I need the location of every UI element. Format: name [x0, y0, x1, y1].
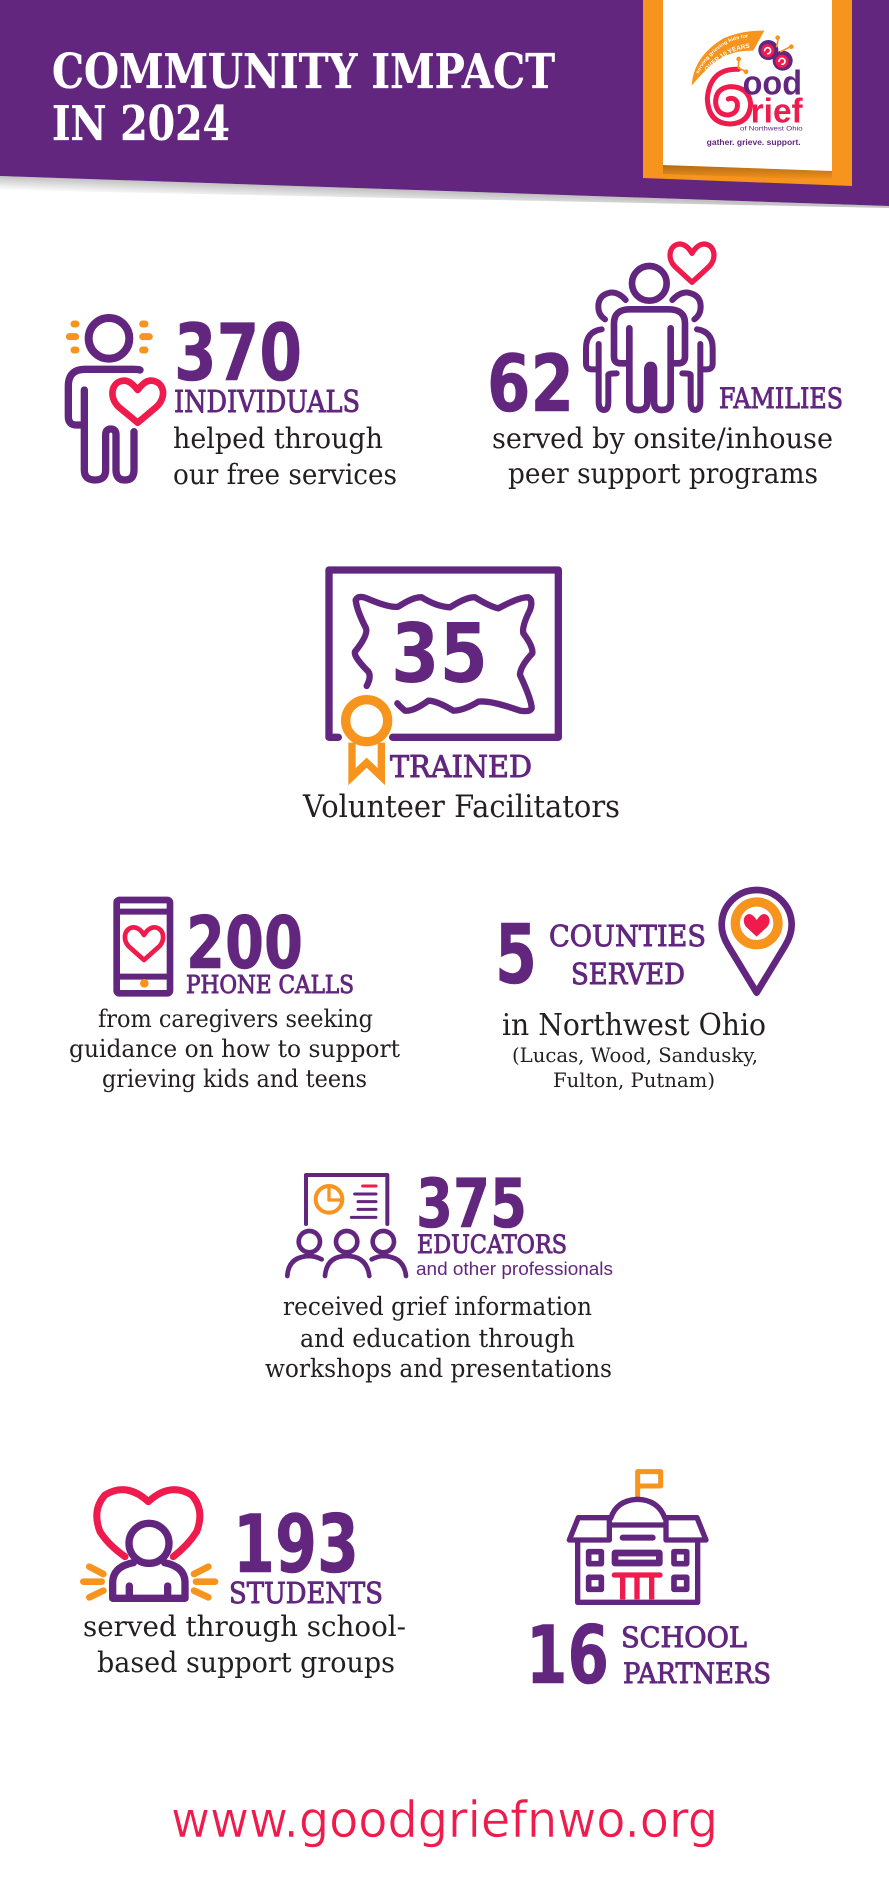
description: peer support programs — [508, 457, 818, 490]
stat: 200 phone calls — [69, 900, 400, 1093]
icon: school building — [569, 1472, 706, 1602]
number: 16 — [526, 1609, 609, 1702]
stat: 5 counties served — [495, 890, 792, 1092]
number: 200 — [186, 901, 303, 985]
logo: Good Grief of Northwest Ohio: ood — [743, 65, 802, 103]
description — [492, 422, 833, 490]
description: served by onsite/inhouse — [492, 422, 833, 455]
stat: 35 trained volunteer facilitators — [302, 570, 620, 825]
logo: Good Grief of Northwest Ohio: of Northwest Ohio — [740, 126, 803, 133]
description: served through school- — [83, 1610, 406, 1643]
label: PHONE CALLS — [186, 971, 354, 999]
description — [265, 1292, 612, 1383]
stat: 193 students — [83, 1490, 406, 1679]
icon: person with heart — [68, 318, 163, 480]
icon: family with heart — [586, 244, 714, 410]
stat: 62 families — [487, 244, 843, 490]
description — [83, 1610, 406, 1679]
title — [52, 44, 555, 152]
description: grieving kids and teens — [102, 1065, 367, 1093]
description: based support groups — [97, 1646, 395, 1679]
logo: Good Grief of Northwest Ohio: serving grieving kids for — [696, 34, 748, 74]
label: STUDENTS — [229, 1576, 383, 1610]
logo: Good Grief of Northwest Ohio — [692, 30, 803, 147]
description: Fulton, Putnam) — [553, 1068, 715, 1092]
number: 5 — [495, 908, 537, 1003]
label: INDIVIDUALS — [174, 385, 360, 420]
description: our free services — [173, 458, 397, 491]
logo: Good Grief of Northwest Ohio: rief — [751, 93, 803, 131]
description: (Lucas, Wood, Sandusky, — [512, 1043, 758, 1067]
title: COMMUNITY IMPACT — [52, 44, 555, 100]
description: received grief information — [283, 1292, 592, 1321]
label: PARTNERS — [623, 1657, 771, 1690]
label: COUNTIES — [549, 919, 706, 953]
description: and education through — [300, 1324, 575, 1353]
stat: 370 individuals — [68, 309, 397, 491]
label: EDUCATORS — [417, 1230, 567, 1259]
stat: 375 educators — [265, 1165, 613, 1383]
label: FAMILIES — [719, 382, 843, 415]
number: 62 — [487, 340, 574, 430]
description: in Northwest Ohio — [502, 1008, 766, 1043]
logo: Good Grief of Northwest Ohio: gather. grieve. support. — [707, 137, 801, 147]
sublabel: and other professionals — [416, 1259, 613, 1279]
number: 370 — [174, 309, 302, 399]
title: IN 2024 — [52, 96, 230, 152]
description — [69, 1005, 400, 1093]
label — [621, 1621, 771, 1690]
description: from caregivers seeking — [98, 1005, 373, 1033]
logo card — [643, 0, 852, 186]
icon: map pin with heart — [722, 890, 792, 993]
description: helped through — [173, 422, 383, 455]
website url: www.goodgriefnwo.org — [171, 1791, 718, 1849]
description — [502, 1008, 766, 1092]
icon: certificate with ribbon — [329, 570, 558, 777]
description: workshops and presentations — [265, 1354, 612, 1383]
header banner — [0, 0, 889, 208]
label: SCHOOL — [621, 1621, 747, 1654]
description: Volunteer Facilitators — [302, 789, 620, 825]
icon: presentation with audience — [287, 1175, 406, 1276]
description — [173, 422, 397, 491]
icon: student in heart — [83, 1490, 215, 1598]
label — [549, 919, 706, 991]
description: guidance on how to support — [69, 1035, 400, 1063]
number: 35 — [391, 607, 488, 702]
icon: phone with heart — [117, 900, 170, 993]
label: SERVED — [571, 957, 685, 991]
logo: Good Grief of Northwest Ohio: OVER 10 YEARS — [704, 44, 750, 70]
label: TRAINED — [390, 750, 532, 785]
number: 193 — [233, 1498, 359, 1591]
number: 375 — [416, 1165, 527, 1244]
stat: 16 school partners — [526, 1472, 771, 1702]
